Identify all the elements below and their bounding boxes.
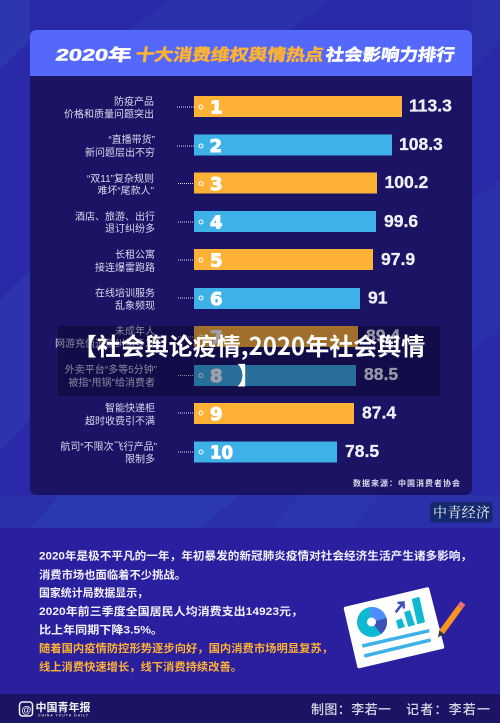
panel: summary <box>0 528 500 694</box>
row 1: 价格和质量问题突出 <box>64 108 154 120</box>
summary text: 2020年是极不平凡的一年，年初暴发的新冠肺炎疫情对社会经济生活产生诸多影响， <box>39 548 472 562</box>
row 3 <box>87 172 429 197</box>
row 1: 1 <box>210 98 223 118</box>
row 8 <box>65 363 398 389</box>
bar chart icon <box>396 597 425 629</box>
pencil <box>438 601 465 638</box>
row 8: 8 <box>210 366 223 387</box>
panel: ranking <box>30 30 472 495</box>
row 6: 6 <box>210 289 223 310</box>
title overlay: 】 <box>237 356 261 391</box>
row 4: 4 <box>210 212 223 234</box>
heading: 2020年 <box>54 45 133 64</box>
title overlay: 【社会舆论疫情,2020年社会舆情 <box>73 327 425 362</box>
row 3: 3 <box>210 174 223 195</box>
row 2: “直播带货” <box>108 133 155 146</box>
row 8: 外卖平台“多等5分钟” <box>65 363 157 376</box>
footer: 记者：李若一 <box>406 702 490 717</box>
row 4 <box>75 210 418 235</box>
pie chart <box>357 607 387 637</box>
row 6: 乱象频现 <box>115 299 155 312</box>
row 7 <box>55 324 400 350</box>
row 2 <box>85 133 443 159</box>
card <box>346 589 442 666</box>
row 4: 退订纠纷多 <box>105 222 155 235</box>
row 8: 88.5 <box>364 364 398 384</box>
summary text: 消费市场也面临着不少挑战。 <box>39 568 186 582</box>
row 3: 难坏“尾款人” <box>97 184 154 197</box>
row 10: 78.5 <box>345 441 379 461</box>
row 1: 113.3 <box>409 96 452 116</box>
summary text: 比上年同期下降3.5%。 <box>39 622 163 636</box>
row 2: 2 <box>210 136 222 157</box>
heading: 十大消费维权舆情热点 <box>134 46 326 64</box>
row 9: 87.4 <box>362 402 396 422</box>
row 6 <box>95 286 388 312</box>
illustration: report card and pencil <box>346 589 465 666</box>
row 4: 99.6 <box>384 211 418 231</box>
row 9 <box>85 402 396 428</box>
row 1: 防疫产品 <box>114 95 154 108</box>
summary text: 随着国内疫情防控形势逐步向好，国内消费市场明显复苏， <box>39 641 333 655</box>
panel body <box>30 30 472 495</box>
arrow <box>396 602 404 612</box>
title overlay <box>58 326 440 396</box>
logo: 中青经济: 中青经济 <box>433 502 490 522</box>
row 9: 9 <box>210 404 223 425</box>
heading <box>54 45 456 64</box>
row 6: 91 <box>368 288 388 308</box>
row 5: 5 <box>210 250 223 272</box>
summary text: 2020年前三季度全国居民人均消费支出14923元， <box>39 604 303 618</box>
row 8: 被指“甩锅”给消费者 <box>68 376 155 389</box>
row 9: 超时收费引不满 <box>85 414 155 428</box>
panel header <box>30 30 472 76</box>
row 2: 新问题层出不穷 <box>85 146 155 159</box>
row 5: 接连爆雷跑路 <box>95 261 155 274</box>
logo: China Youth Daily <box>20 700 90 718</box>
logo: China Youth Daily: @ <box>22 705 32 716</box>
row 9: 智能快递柜 <box>105 402 155 414</box>
row 3: 100.2 <box>384 172 429 192</box>
row 10: 10 <box>210 442 233 464</box>
row 6: 在线培训服务 <box>95 286 155 300</box>
row 7: 网游充值退款纠纷多发 <box>55 337 155 350</box>
row 10: 航司“不限次飞行产品” <box>60 440 157 453</box>
logo: China Youth Daily: 中国青年报 <box>36 700 90 714</box>
credits: 制图：李若一 <box>311 702 391 717</box>
heading: 社会影响力排行 <box>324 45 456 64</box>
text lines <box>362 631 431 656</box>
row 5: 长租公寓 <box>115 248 155 261</box>
summary text: 国家统计局数据显示， <box>39 586 148 600</box>
row 1 <box>64 95 452 120</box>
row 5 <box>95 248 415 274</box>
row 5: 97.9 <box>381 249 415 269</box>
row 10: 限制多 <box>125 452 155 466</box>
row 7: 89.4 <box>366 326 400 346</box>
row 7: 未成年人 <box>115 324 155 338</box>
row 4: 酒店、旅游、出行 <box>75 210 155 223</box>
footer <box>0 694 500 723</box>
row 10 <box>60 440 379 466</box>
summary text: 线上消费快速增长，线下消费持续改善。 <box>39 660 242 674</box>
row 2: 108.3 <box>399 134 443 154</box>
data source: 数据来源：中国消费者协会 <box>353 478 460 488</box>
summary text <box>39 548 472 674</box>
row 7: 7 <box>210 328 223 348</box>
row 3: “双11”复杂规则 <box>87 172 154 185</box>
logo: China Youth Daily: CHINA YOUTH DAILY <box>38 714 89 718</box>
